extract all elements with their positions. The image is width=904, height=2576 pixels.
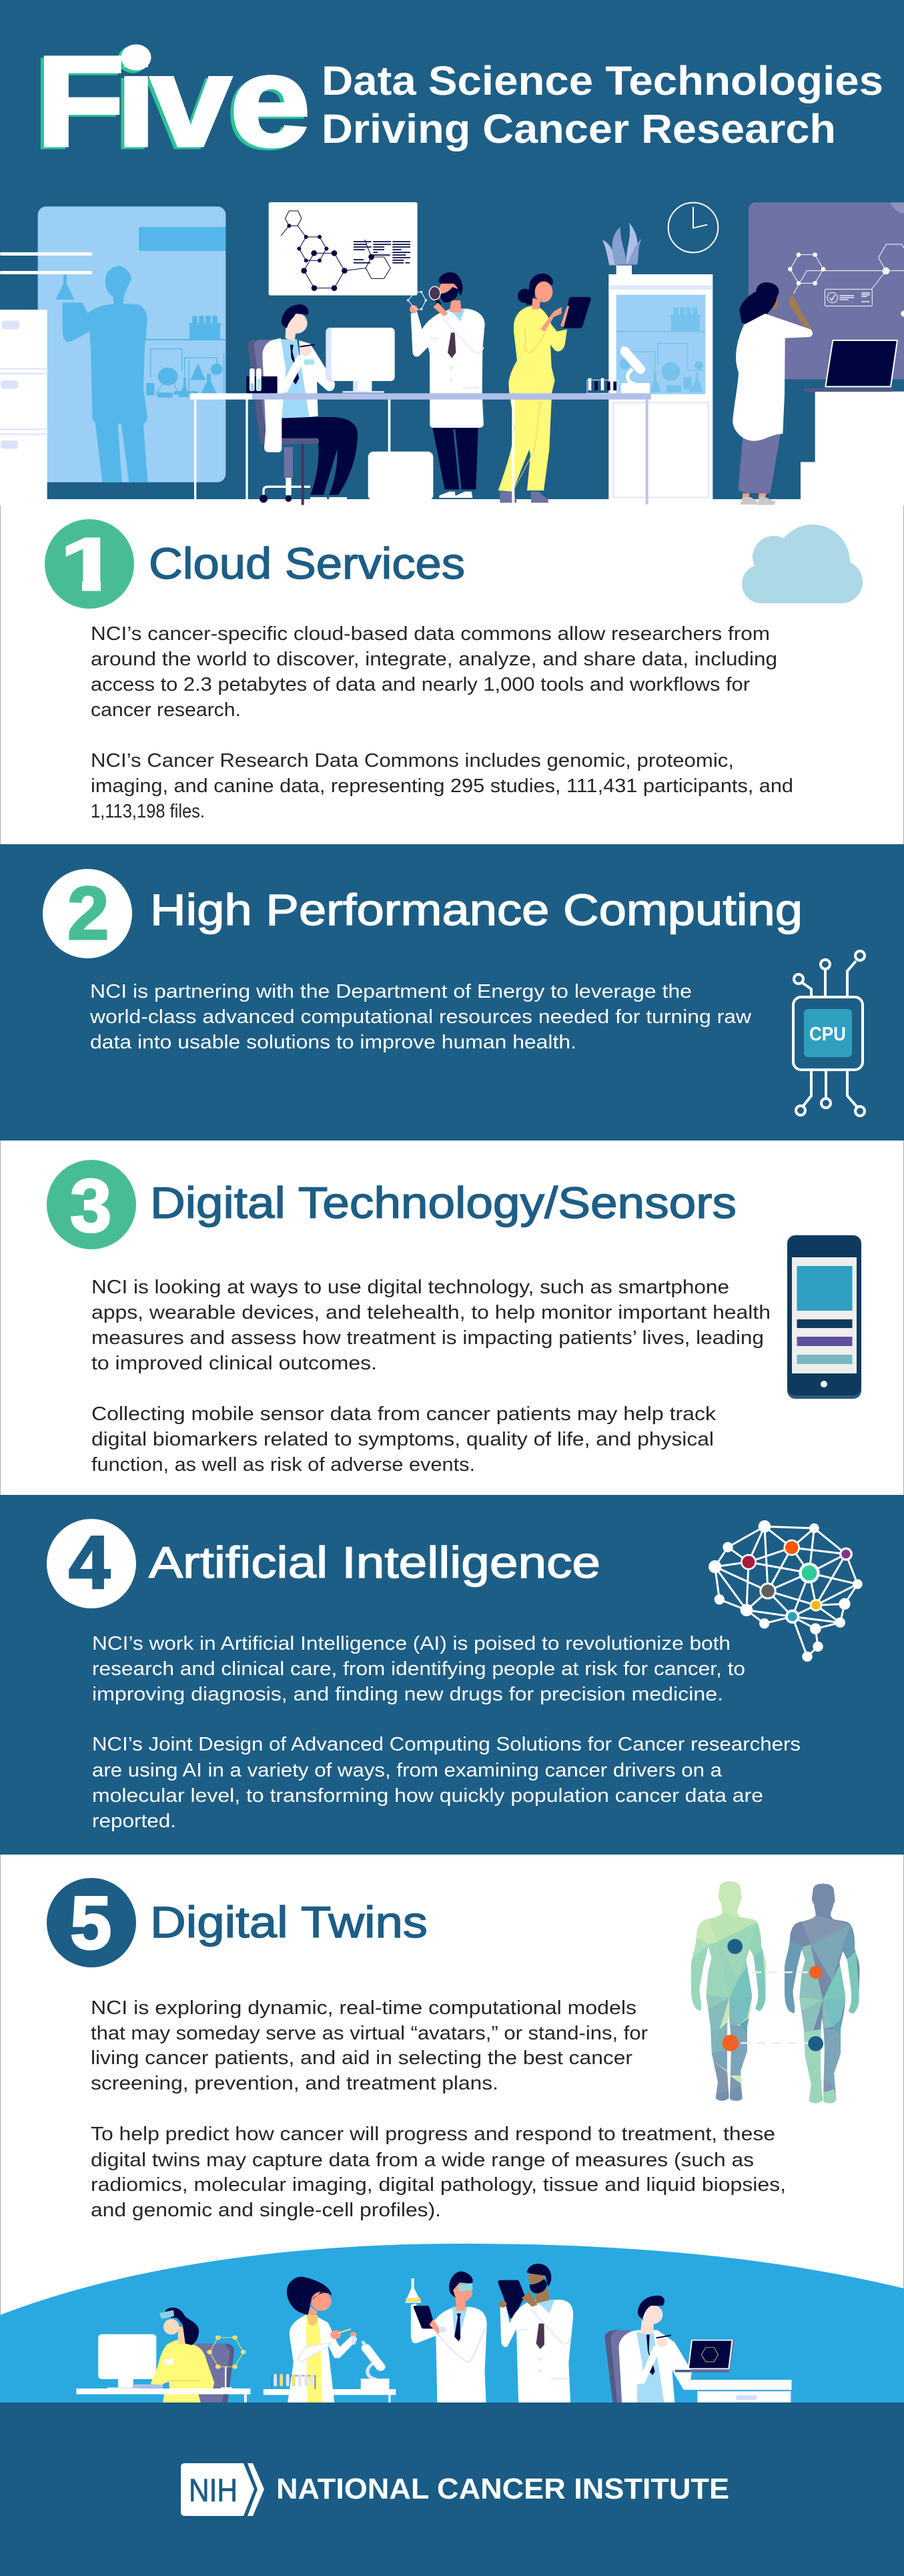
number badge 5 <box>47 1878 136 1967</box>
potted plant <box>602 222 642 275</box>
text: data commons: NCI’s cancer-specific cloud-based data commons allow researchers from <box>91 623 770 645</box>
text: research data commons: 1,113,198 files. <box>91 801 205 822</box>
bottom blue curve <box>0 2244 904 2402</box>
text: joint design: reported. <box>92 1811 176 1832</box>
text: mobile sensor data: digital biomarkers related to symptoms, quality of life, and physical <box>91 1429 714 1450</box>
text: AI for care: improving diagnosis, and finding new drugs for precision medicine. <box>92 1684 723 1705</box>
number badge 3: 3 <box>70 1164 111 1247</box>
heading: Artificial Intelligence <box>149 1538 600 1587</box>
text: predicting progress: digital twins may capture data from a wide range of measures (such as <box>91 2150 754 2171</box>
text: digital technology: NCI is looking at ways to use digital technology, such as smartphone <box>91 1277 729 1298</box>
text: AI for care <box>92 1633 745 1705</box>
text: digital technology <box>91 1277 771 1374</box>
text: AI for care: research and clinical care, from identifying people at risk for cancer, to <box>92 1658 745 1680</box>
text: mobile sensor data: Collecting mobile sensor data from cancer patients may help track <box>91 1403 717 1425</box>
lab bench <box>190 393 650 503</box>
panel: artificial intelligence <box>0 1495 904 1855</box>
text: predicting progress <box>91 2124 786 2221</box>
text: data commons: access to 2.3 petabytes of data and nearly 1,000 tools and workflows for <box>91 674 750 695</box>
scientist with magnifier <box>407 272 485 498</box>
text: department of energy: NCI is partnering with the Department of Energy to leverage the <box>90 981 692 1002</box>
text: data commons: around the world to discover, integrate, analyze, and share data, including <box>91 649 777 670</box>
icon: neural network brain <box>709 1520 863 1662</box>
lab window with silhouette <box>38 206 225 482</box>
scientist with pipette <box>264 2277 396 2402</box>
number badge 3 <box>47 1160 136 1249</box>
storage cabinet with glass door <box>587 274 713 505</box>
text: computational models <box>91 1997 648 2094</box>
icon: cloud <box>742 525 863 603</box>
heading: Digital Twins <box>150 1897 428 1947</box>
number badge 4: 4 <box>69 1521 110 1604</box>
purple wall panel with network <box>749 202 904 379</box>
footer band <box>0 2402 904 2576</box>
microscope <box>361 2341 389 2389</box>
word Five shadow: Five <box>33 33 307 175</box>
number badge 2 <box>43 869 132 958</box>
text: mobile sensor data <box>91 1403 717 1476</box>
number badge 4 <box>47 1519 136 1608</box>
footer logo <box>181 2463 729 2516</box>
text: joint design: molecular level, to transforming how quickly population cancer data are <box>92 1785 763 1807</box>
text: AI for care: NCI’s work in Artificial Intelligence (AI) is poised to revolutionize both <box>92 1633 731 1654</box>
text: department of energy <box>89 981 752 1053</box>
text: predicting progress: To help predict how cancer will progress and respond to treatment, these <box>91 2124 775 2145</box>
scientist at computer <box>76 2308 250 2402</box>
panel: high performance computing <box>0 844 904 1141</box>
illustration: lab scene <box>0 202 904 505</box>
number badge 1 <box>45 519 134 609</box>
title text: Data Science Technologies <box>322 58 883 103</box>
text: predicting progress: radiomics, molecular imaging, digital pathology, tissue and liquid biopsies, <box>91 2174 786 2196</box>
edge lines <box>0 506 903 2316</box>
title text <box>322 58 883 151</box>
text: research data commons: NCI’s Cancer Research Data Commons includes genomic, proteomic, <box>91 750 734 771</box>
scientist with flask and tablet <box>405 2271 487 2402</box>
icon: smartphone <box>787 1235 861 1399</box>
title <box>33 31 883 175</box>
heading: Digital Technology/Sensors <box>150 1178 737 1227</box>
heading: High Performance Computing <box>150 885 803 934</box>
laptop on white steps <box>801 340 904 505</box>
text: research data commons <box>91 750 793 822</box>
scientist from behind <box>733 282 813 505</box>
figure two <box>785 1883 859 2104</box>
markers and connectors <box>723 1939 823 2051</box>
header band <box>0 0 904 499</box>
number badge 1: 1 <box>60 523 118 606</box>
NIH badge: NIH <box>189 2473 238 2509</box>
figure one <box>691 1881 766 2101</box>
computer monitor <box>326 328 395 393</box>
seated scientist <box>246 304 358 505</box>
text: mobile sensor data: function, as well as risk of adverse events. <box>91 1454 475 1476</box>
text: joint design: NCI’s Joint Design of Advanced Computing Solutions for Cancer researchers <box>92 1734 801 1755</box>
text: department of energy: world-class advanced computational resources needed for turning raw <box>89 1006 752 1028</box>
heading: Cloud Services <box>149 539 465 588</box>
bearded scientist with tablet <box>498 2264 573 2402</box>
white speed lines <box>0 252 92 274</box>
text: computational models: that may someday serve as virtual “avatars,” or stand-ins, for <box>91 2023 648 2044</box>
icon: two human bodies <box>687 1875 869 2109</box>
panel: digital twins <box>47 1875 869 2221</box>
clock <box>668 203 718 252</box>
illustration: team of scientists <box>76 2264 791 2402</box>
white cabinet <box>0 310 248 501</box>
word Five: Five <box>36 31 310 173</box>
institute name: NATIONAL CANCER INSTITUTE <box>276 2473 729 2505</box>
icon: cpu chip <box>793 951 865 1116</box>
text: computational models: NCI is exploring dynamic, real-time computational models <box>91 1997 636 2019</box>
whiteboard with molecule <box>269 202 418 296</box>
text: data commons: cancer research. <box>91 699 241 721</box>
text: predicting progress: and genomic and single-cell profiles). <box>91 2200 441 2221</box>
title text: Driving Cancer Research <box>322 106 836 151</box>
icon: cpu chip: CPU <box>809 1024 846 1045</box>
panel: cloud services <box>45 519 863 822</box>
number badge 2: 2 <box>67 872 109 955</box>
text: research data commons: imaging, and canine data, representing 295 studies, 111,431 participants, and <box>91 775 793 797</box>
text: data commons <box>91 623 777 721</box>
seated scientist with laptop <box>604 2296 791 2402</box>
text: joint design: are using AI in a variety of ways, from examining cancer drivers on a <box>92 1760 723 1781</box>
text: computational models: living cancer patients, and aid in selecting the best cancer <box>91 2047 632 2069</box>
text: computational models: screening, prevention, and treatment plans. <box>91 2073 498 2094</box>
number badge 5: 5 <box>70 1881 111 1965</box>
text: digital technology: measures and assess how treatment is impacting patients’ lives, leading <box>91 1327 764 1349</box>
text: joint design <box>92 1734 801 1832</box>
text: digital technology: apps, wearable devices, and telehealth, to help monitor important health <box>91 1302 771 1323</box>
text: department of energy: data into usable solutions to improve human health. <box>90 1032 576 1053</box>
NIH badge <box>181 2463 264 2516</box>
text: digital technology: to improved clinical outcomes. <box>91 1353 377 1374</box>
panel: digital technology and sensors <box>47 1160 861 1476</box>
scientist in yellow with tablet <box>498 274 591 503</box>
